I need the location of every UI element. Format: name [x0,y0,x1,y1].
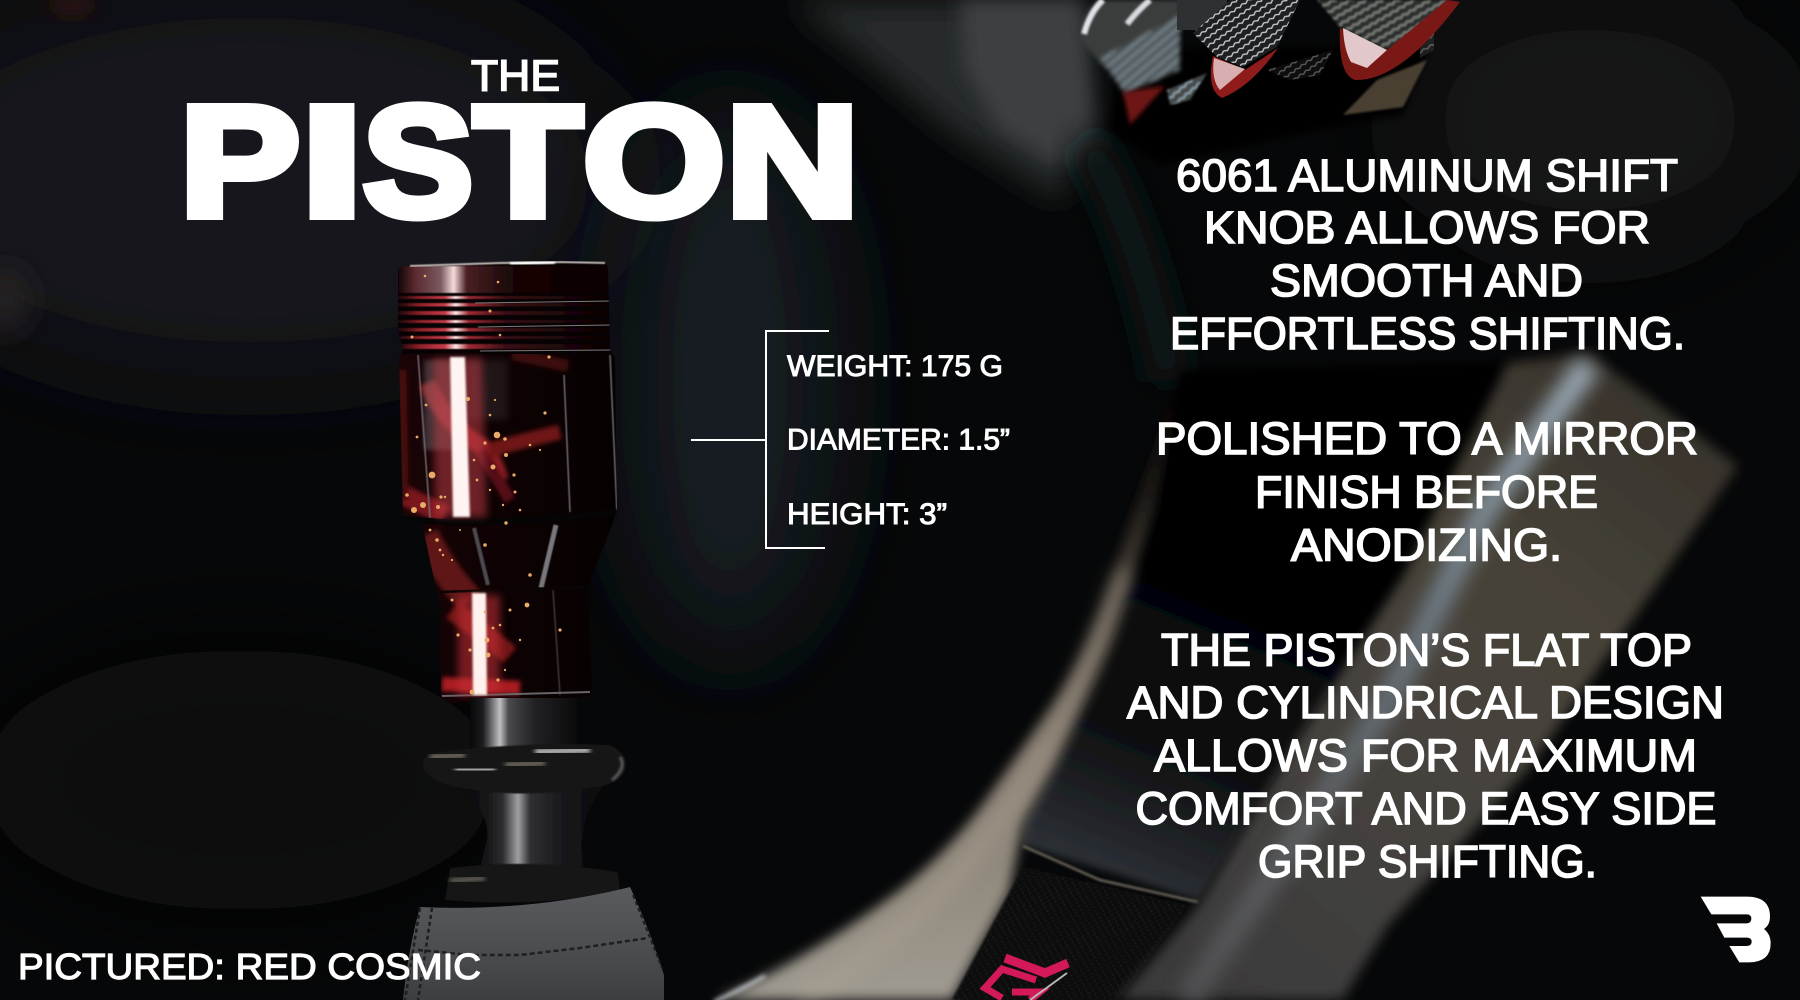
title: N [726,74,859,250]
description: aluminum: KNOB ALLOWS FOR [1204,202,1650,253]
threads [398,292,552,354]
pictured caption: PICTURED: RED COSMIC [18,946,481,987]
specs list: DIAMETER: 1.5” [787,424,1010,456]
wide grey trim with highlight [1118,354,1738,1000]
glow and highlight strips [433,358,487,517]
silver curved trim [714,370,1181,1000]
gold speckles [405,275,562,694]
title: THE [471,52,560,100]
carbon panel with STi badge [952,846,1198,1000]
description: flat top [1127,624,1724,887]
description: aluminum: SMOOTH AND [1270,255,1583,306]
specs list [787,350,1010,531]
dark console panel between trims [1023,362,1510,900]
description: polished: POLISHED TO A MIRROR [1156,413,1698,464]
specs list: HEIGHT: 3” [787,498,947,531]
chrome sheen and facets [424,360,452,450]
description: flat top: THE PISTON’S FLAT TOP [1161,624,1692,676]
description: aluminum: 6061 ALUMINUM SHIFT [1176,150,1678,201]
shift knob: red cosmic piston [396,262,618,703]
title [180,52,859,250]
gear lever knobs, top right [1080,0,1460,165]
description: polished [1156,413,1698,570]
shifter shaft and collar [423,698,626,903]
red swirl [402,354,568,688]
title: O [583,74,725,250]
title: S [363,74,473,250]
icon: brand logo [1701,897,1771,962]
description: polished: ANODIZING. [1291,520,1562,570]
title: I [301,74,363,250]
spec bracket [691,331,829,548]
description: polished: FINISH BEFORE [1255,466,1598,518]
cap top [398,266,550,294]
leather shift boot [403,887,664,1000]
description: flat top: AND CYLINDRICAL DESIGN [1127,677,1724,728]
specs list: WEIGHT: 175 G [787,350,1003,383]
description: flat top: ALLOWS FOR MAXIMUM [1154,730,1697,781]
title: P [180,74,300,250]
description: flat top: GRIP SHIFTING. [1258,836,1597,887]
description: aluminum: EFFORTLESS SHIFTING. [1170,308,1685,359]
description: flat top: COMFORT AND EASY SIDE [1136,783,1716,834]
title: T [474,74,582,250]
description: aluminum [1170,150,1685,359]
